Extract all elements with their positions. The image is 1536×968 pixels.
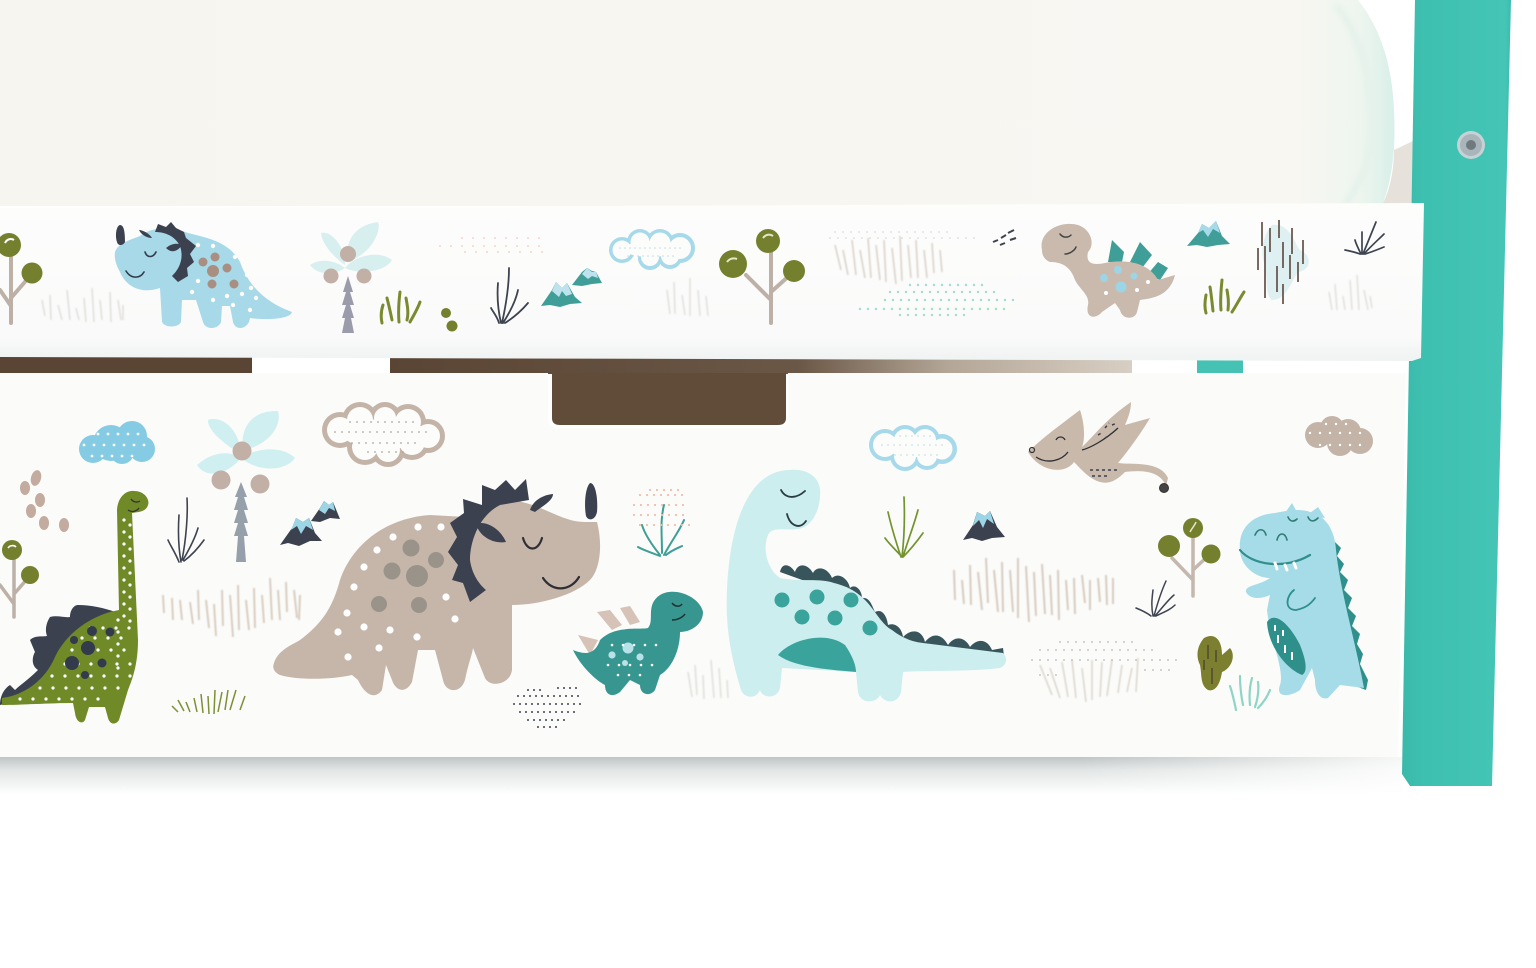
- brown grass with dots: [830, 232, 975, 284]
- icon: dark plant: [491, 268, 528, 323]
- icon: green grass strip: [172, 690, 245, 714]
- drawer shadow: [0, 757, 1402, 795]
- bed rail: [0, 203, 1424, 361]
- icon: dark plant right: [1345, 222, 1384, 254]
- icon: floral sprig: [634, 490, 690, 556]
- brown grass right: [954, 558, 1113, 622]
- dinosaur: pterosaur: [1028, 402, 1168, 492]
- dinosaur: green brachiosaurus: [0, 491, 148, 724]
- dinosaur: blue triceratops: [115, 222, 292, 328]
- icon: tree drawer left: [0, 540, 39, 617]
- cloud: solid beige: [1305, 416, 1373, 456]
- icon: olive cactus: [1197, 636, 1233, 690]
- faint grass: [42, 288, 123, 322]
- cloud: beige outline: [322, 402, 445, 467]
- brown grass left: [163, 578, 300, 637]
- dinosaur: mint brachiosaurus: [727, 470, 1006, 701]
- icon: palm large: [197, 411, 295, 562]
- icon: green plant: [885, 497, 923, 557]
- speckled grass: [1032, 642, 1177, 702]
- pink dots: [440, 238, 550, 252]
- gap under rail: [0, 356, 1408, 374]
- cloud: solid blue: [79, 421, 155, 464]
- mattress: [0, 0, 1394, 206]
- rail artwork: [0, 220, 1384, 333]
- teal dots: [860, 285, 1015, 315]
- icon: tree drawer right: [1158, 518, 1220, 596]
- icon: small footprints: [441, 308, 458, 332]
- icon: dark plant drawer: [168, 498, 204, 562]
- bed slat behind the mattress: [1382, 140, 1415, 205]
- dinosaur: beige stegosaurus: [1042, 224, 1175, 318]
- cloud: blue outline: [609, 229, 695, 270]
- icon: green grass right: [1205, 280, 1244, 313]
- icon: screw: [1457, 131, 1485, 159]
- faint grass middle: [688, 660, 728, 699]
- icon: cactus stripes: [1258, 220, 1309, 304]
- icon: palm: [310, 222, 392, 333]
- icon: tree center: [719, 229, 805, 323]
- dinosaur: big triceratops: [273, 479, 600, 695]
- speckle heart: [514, 688, 586, 727]
- icon: dark mountain drawer: [963, 511, 1005, 541]
- drawer handle notch: [552, 373, 786, 425]
- icon: green grass: [381, 292, 420, 323]
- icon: teal grass: [1230, 676, 1270, 710]
- teal bed post: [1402, 0, 1511, 786]
- faint grass right: [1329, 275, 1372, 310]
- footprints: [20, 469, 69, 532]
- dinosaur: blue t-rex: [1240, 503, 1368, 698]
- cloud: blue outline drawer: [869, 425, 957, 471]
- icon: teal mountain right: [1187, 221, 1230, 247]
- icon: dark mountains: [280, 501, 340, 546]
- drawer front: [0, 373, 1406, 757]
- icon: tree left: [0, 233, 42, 323]
- dinosaur: teal stegosaurus: [573, 592, 703, 695]
- icon: dark plant small: [1136, 581, 1175, 616]
- icon: teal mountains: [541, 268, 602, 307]
- dark dashes: [993, 230, 1016, 245]
- faint grass center: [667, 278, 708, 316]
- drawer artwork: [0, 402, 1373, 727]
